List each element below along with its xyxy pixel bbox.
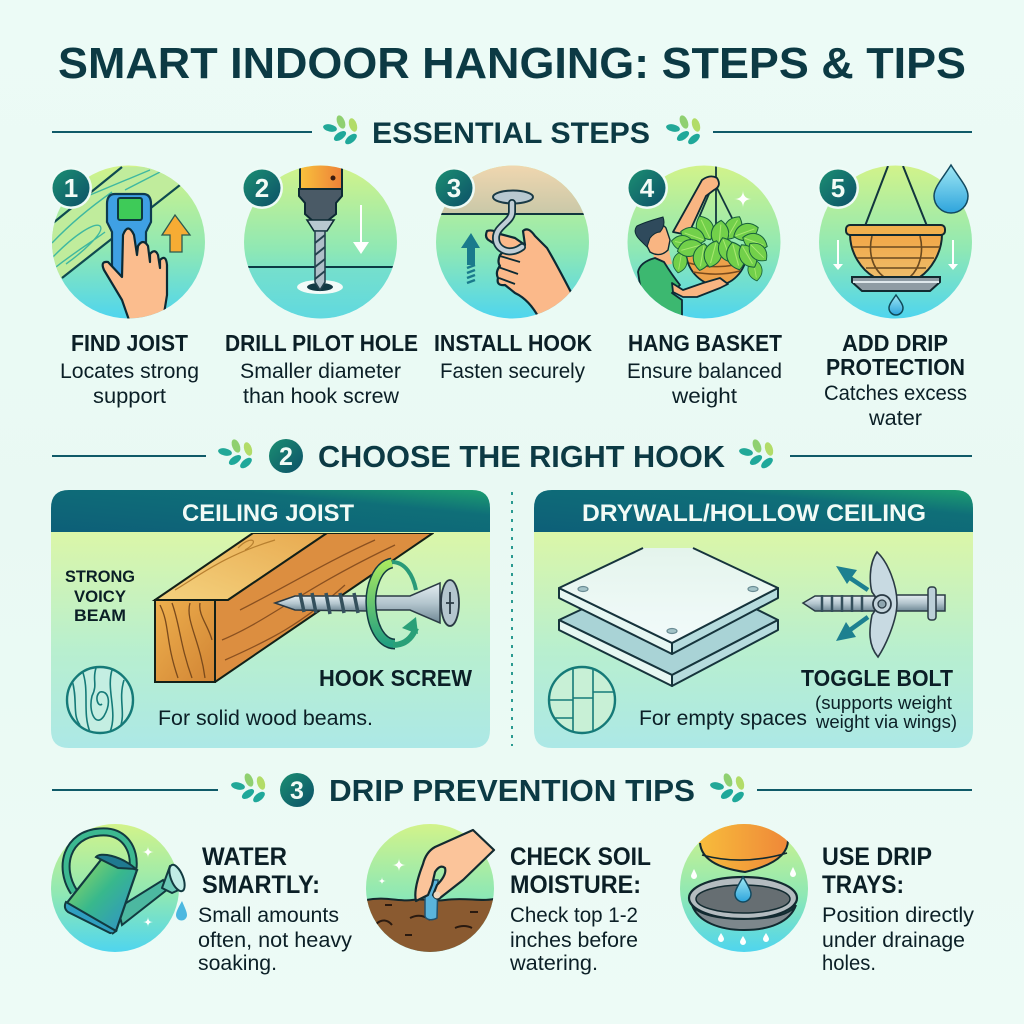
label: toggle bolt note: weight via wings) (815, 712, 957, 732)
hook screw with rotation arrow (275, 562, 459, 645)
toggle bolt (803, 552, 945, 657)
step 1 heading: FIND JOIST (71, 330, 188, 356)
icon: watering can (51, 824, 188, 952)
icon: pot over drip tray (680, 815, 808, 952)
step 4 heading: HANG BASKET (628, 330, 782, 356)
section header: choose the right hook: CHOOSE THE RIGHT HOOK (318, 439, 726, 474)
tip 3 description: under drainage (822, 929, 965, 952)
caption: empty spaces: For empty spaces (639, 707, 807, 730)
tip 2: check soil moisture (366, 824, 651, 975)
step 5 description (824, 382, 967, 430)
step 4 description (627, 360, 782, 408)
tip 1 description: often, not heavy (198, 929, 353, 952)
label: strong voicy beam: STRONG (65, 567, 135, 586)
panel: drywall hollow ceiling (534, 490, 973, 748)
panel header: ceiling joist (51, 490, 490, 532)
icon: stud finder (52, 166, 205, 320)
caption: solid wood: For solid wood beams. (158, 707, 373, 730)
panel header: drywall: DRYWALL/HOLLOW CEILING (582, 500, 926, 527)
panel: ceiling joist (51, 490, 490, 748)
label: hook screw: HOOK SCREW (319, 665, 472, 691)
label: strong voicy beam (65, 567, 135, 625)
tip 3 heading: USE DRIP (822, 843, 932, 871)
icon: person hanging basket (628, 166, 780, 322)
section header: drip prevention tips: DRIP PREVENTION TIPS (329, 773, 695, 808)
tip 1 description: Small amounts (198, 904, 339, 927)
label: toggle bolt: TOGGLE BOLT (801, 665, 953, 691)
panel header: ceiling joist: CEILING JOIST (182, 500, 354, 527)
tip 3: use drip trays (680, 815, 975, 975)
step 4 description: weight (671, 385, 737, 408)
step 3 heading: INSTALL HOOK (434, 330, 592, 356)
section header: drip prevention tips (52, 772, 972, 808)
step 4 description: Ensure balanced (627, 360, 782, 383)
step 2 description (240, 360, 401, 408)
step 3: install hook (433, 160, 592, 383)
step 3 description: Fasten securely (440, 360, 585, 383)
title: SMART INDOOR HANGING: STEPS & TIPS (58, 39, 966, 88)
step 5 heading (826, 330, 965, 380)
icon: wood grain (67, 667, 133, 733)
tip 2 description: Check top 1-2 (510, 904, 638, 927)
step 5 description: water (868, 407, 922, 430)
badge 3 (433, 167, 475, 209)
section header: choose the right hook (52, 438, 972, 474)
tip 1 heading: WATER (202, 843, 287, 871)
tip 1 heading: SMARTLY: (202, 871, 320, 899)
section header: choose the right hook: 2 (279, 443, 293, 471)
divider (511, 492, 513, 746)
icon: basket with tray (819, 165, 972, 318)
badge 5: 5 (831, 173, 845, 203)
icon: drill (244, 160, 397, 320)
badge 2: 2 (255, 173, 269, 203)
tip 3 description: Position directly (822, 904, 975, 927)
step 4: hang basket (626, 166, 782, 408)
section header: drip prevention tips: 3 (290, 777, 304, 805)
badge 1 (50, 167, 92, 209)
tip 3 description (822, 904, 975, 975)
step 1 description: Locates strong (60, 360, 199, 383)
step 1 description: support (93, 385, 166, 408)
label: toggle bolt note: (supports weight (815, 693, 952, 713)
label: strong voicy beam: BEAM (74, 606, 126, 625)
badge 4: 4 (640, 173, 655, 203)
step 5 heading: ADD DRIP (842, 330, 948, 356)
icon: finger in soil (366, 824, 494, 955)
badge 5 (817, 167, 859, 209)
tip 2 heading: MOISTURE: (510, 871, 641, 899)
step 5: add drip protection (817, 165, 972, 430)
step 5 description: Catches excess (824, 382, 967, 405)
section header: essential steps: ESSENTIAL STEPS (372, 117, 650, 150)
step 2 heading: DRILL PILOT HOLE (225, 330, 418, 356)
label: toggle bolt note (815, 693, 957, 732)
badge 1: 1 (64, 173, 78, 203)
tip 1 description: soaking. (198, 952, 277, 975)
wood beam (155, 533, 433, 682)
panel header: drywall (534, 490, 973, 532)
step 2 description: than hook screw (243, 385, 400, 408)
icon: hook and hand (436, 160, 590, 320)
badge 4 (626, 167, 668, 209)
step 1: find joist (50, 166, 205, 408)
tip 3 heading: TRAYS: (822, 871, 904, 899)
tip 2 description: watering. (509, 952, 598, 975)
step 2 description: Smaller diameter (240, 360, 401, 383)
tip 1 description (198, 904, 353, 975)
section header: essential steps (52, 114, 972, 150)
tip 1: water smartly (51, 824, 353, 975)
tip 3 description: holes. (822, 952, 876, 975)
step 5 heading: PROTECTION (826, 354, 965, 380)
badge 2 (241, 167, 283, 209)
tip 1 heading (202, 843, 320, 899)
step 1 description (60, 360, 199, 408)
tip 2 description (509, 904, 638, 975)
tip 2 heading (510, 843, 651, 899)
icon: hollow ceiling framing (548, 667, 616, 735)
tip 3 heading (822, 843, 932, 899)
tip 2 description: inches before (510, 929, 638, 952)
tip 2 heading: CHECK SOIL (510, 843, 651, 871)
label: strong voicy beam: VOICY (74, 587, 127, 606)
badge 3: 3 (447, 173, 461, 203)
drywall sheets (559, 548, 778, 686)
step 2: drill pilot hole (225, 160, 418, 408)
